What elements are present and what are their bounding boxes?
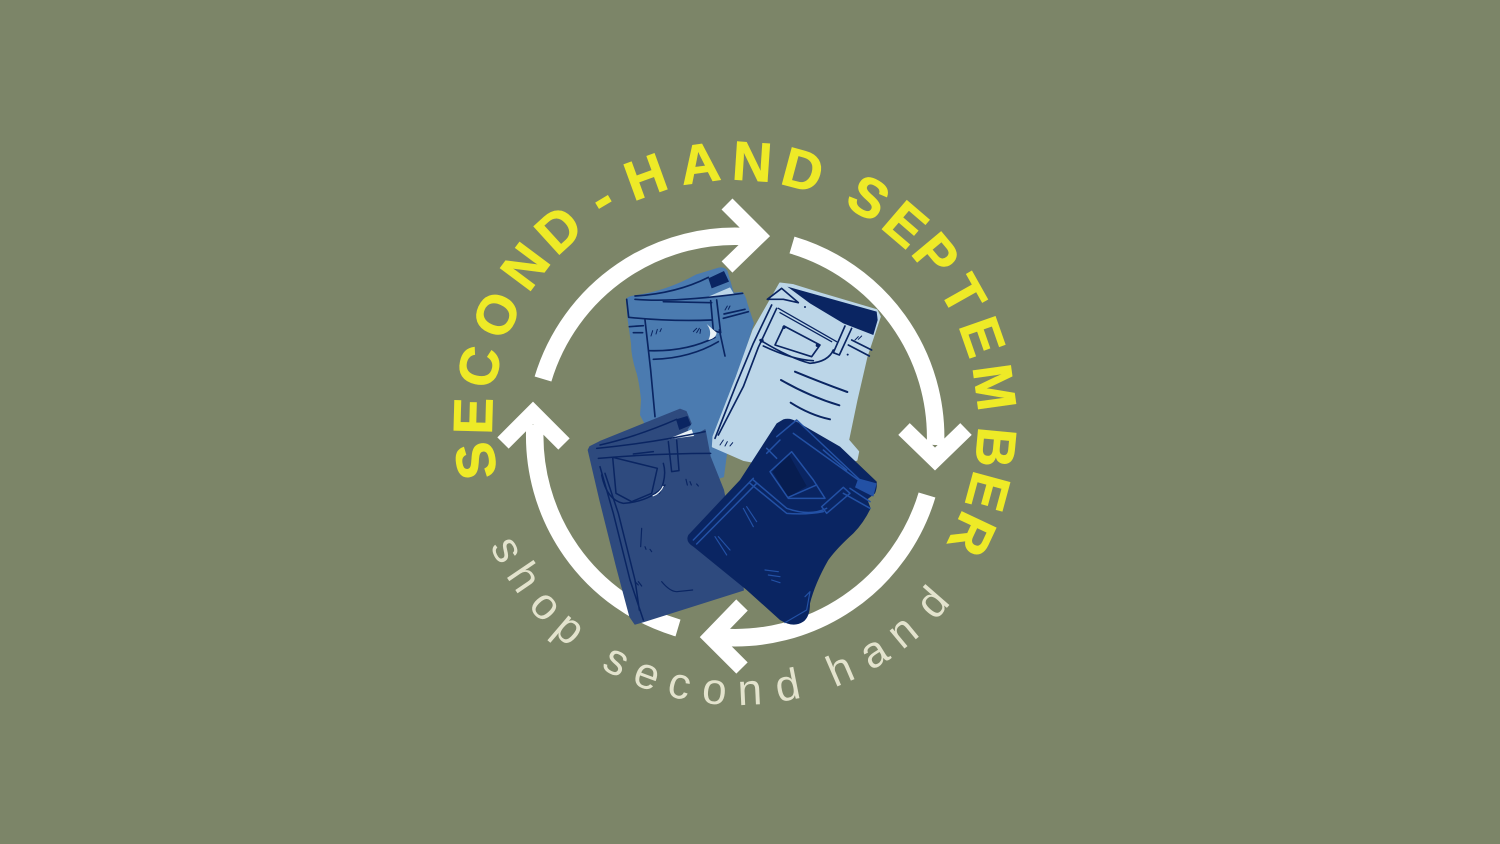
jeans: denim dark blue: [588, 409, 743, 624]
heading: second-hand september: SECOND-HAND SEPTEMBER: [454, 141, 1016, 554]
arrow: bottom-right: [711, 495, 927, 668]
tagline: shop second hand: shop second hand: [492, 540, 950, 706]
recycling ring of four arrows: [503, 204, 966, 668]
arrow: top-right: [792, 245, 966, 459]
arrow: top-left: [543, 204, 759, 379]
jeans: light blue: [713, 283, 880, 473]
jeans: medium blue: [627, 268, 753, 490]
jeans: navy: [687, 419, 877, 625]
arrow: bottom-left: [503, 413, 678, 628]
